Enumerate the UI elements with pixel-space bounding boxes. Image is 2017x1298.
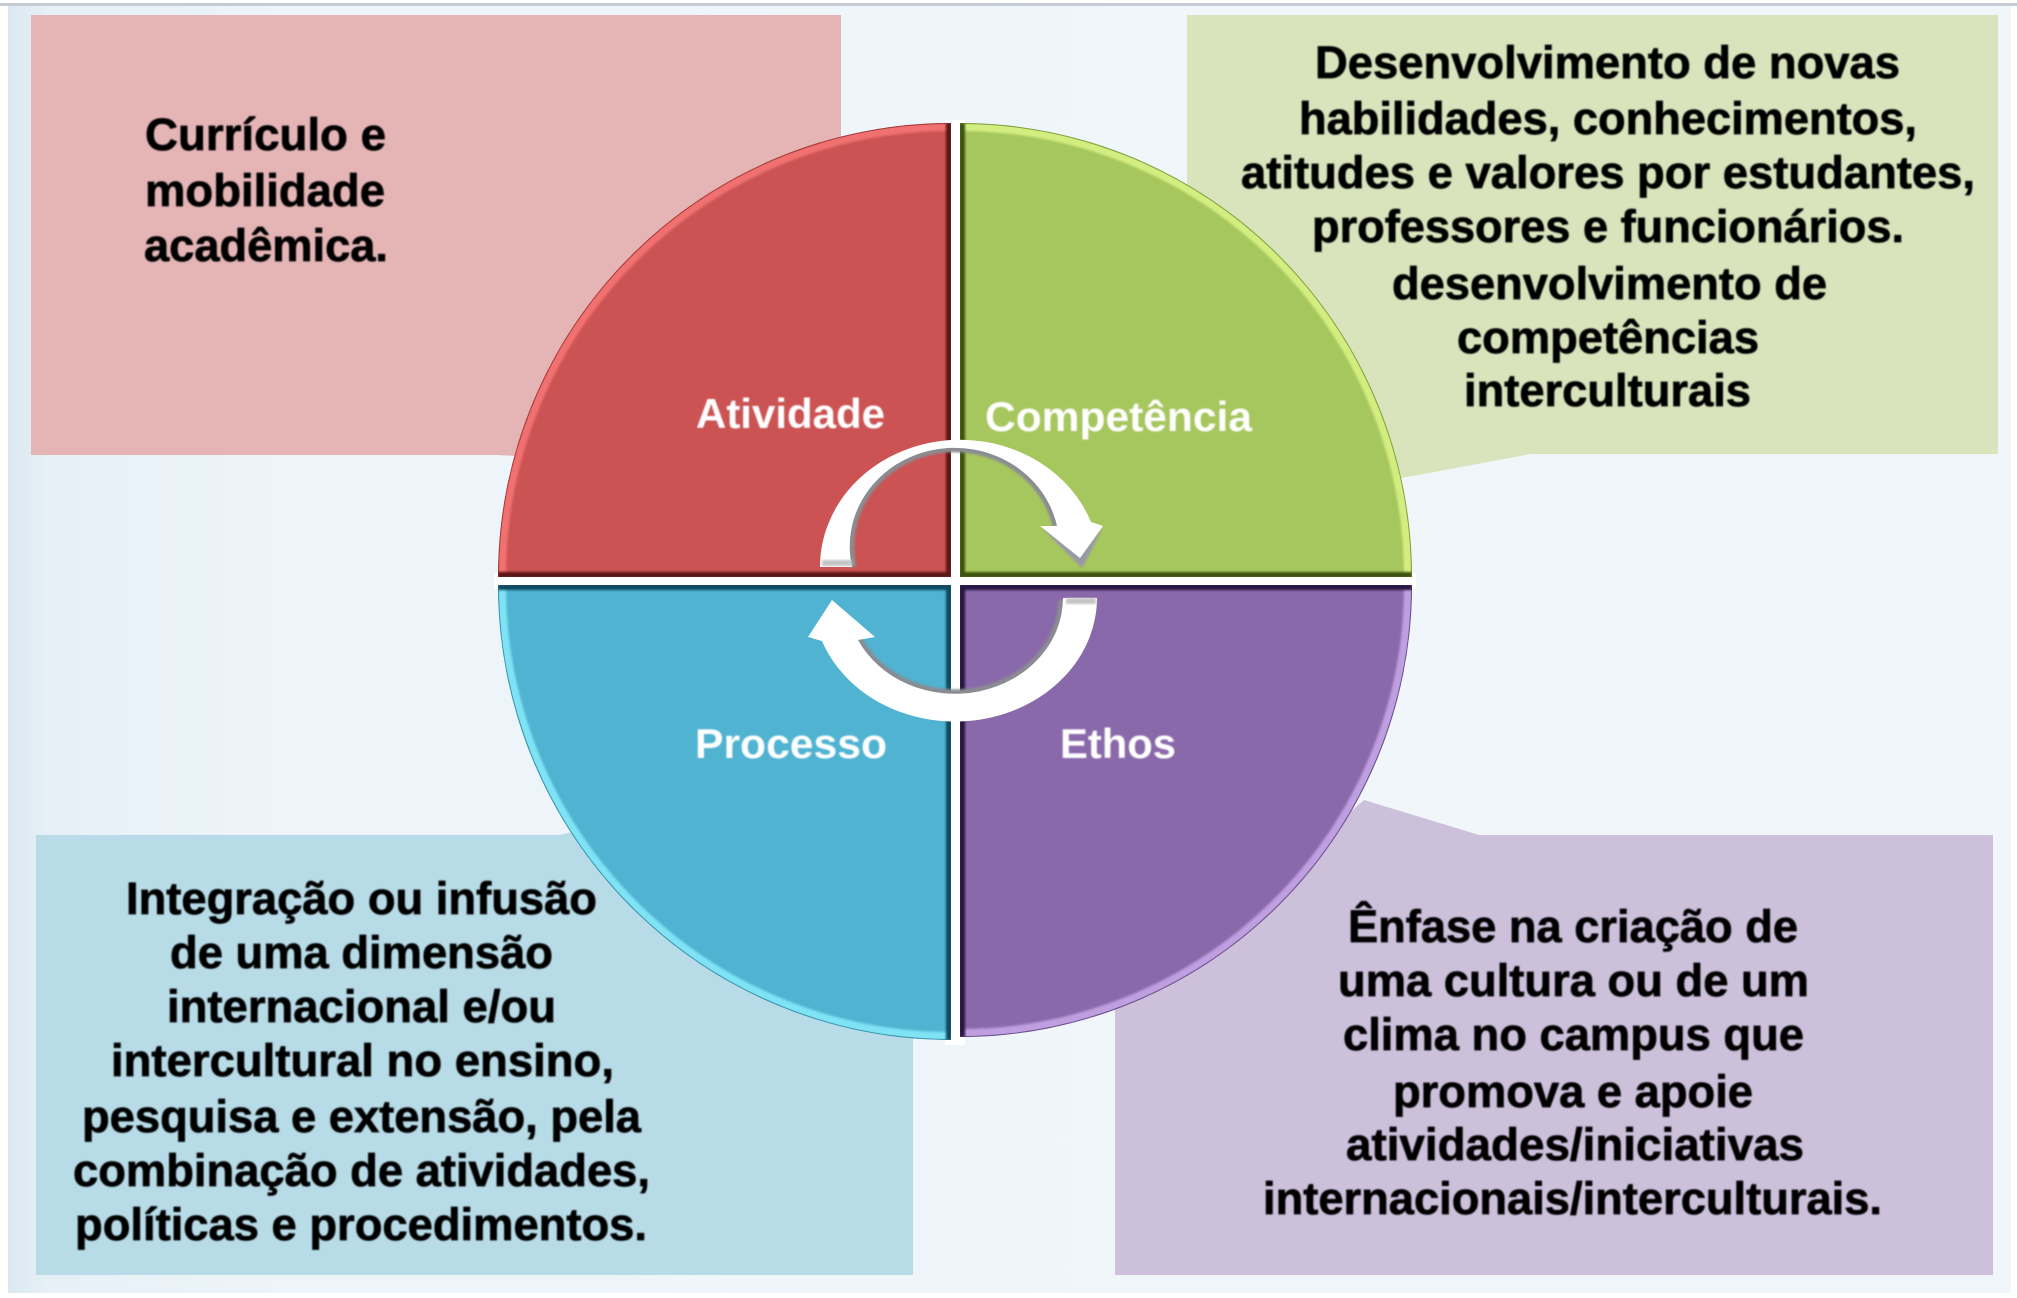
text: Ethos description: Ênfase na criação de bbox=[1348, 901, 1798, 952]
text: Ethos description bbox=[1263, 901, 1882, 1224]
text: Competência description: desenvolvimento de bbox=[1392, 258, 1827, 309]
quadrant: Competência bbox=[960, 123, 1412, 577]
text: Processo description: políticas e procedimentos. bbox=[75, 1199, 647, 1250]
circle diagram bbox=[494, 120, 1416, 1045]
text: Ethos description: internacionais/interculturais. bbox=[1263, 1173, 1882, 1224]
text: Competência description: interculturais bbox=[1464, 365, 1751, 416]
text: Competência description: Desenvolvimento de novas bbox=[1315, 37, 1900, 88]
label: Processo: Processo bbox=[695, 720, 887, 767]
quadrant: Processo bbox=[498, 585, 951, 1040]
text: Competência description: professores e funcionários. bbox=[1312, 201, 1904, 252]
text: Ethos description: promova e apoie bbox=[1393, 1066, 1753, 1117]
label: Atividade: Atividade bbox=[696, 390, 885, 437]
quadrant: Ethos bbox=[960, 585, 1412, 1037]
text: Ethos description: uma cultura ou de um bbox=[1338, 955, 1809, 1006]
text: Atividade description: Currículo e bbox=[145, 109, 386, 160]
text: Atividade description: mobilidade bbox=[145, 165, 385, 216]
arrow: bottom clockwise bbox=[808, 598, 1097, 722]
label: Competência: Competência bbox=[985, 393, 1253, 440]
text: Competência description bbox=[1241, 37, 1975, 416]
text: Atividade description bbox=[144, 109, 388, 271]
text: Competência description: competências bbox=[1457, 312, 1759, 363]
text: Competência description: atitudes e valores por estudantes, bbox=[1241, 147, 1975, 198]
text: Processo description: de uma dimensão bbox=[170, 927, 553, 978]
label: Ethos: Ethos bbox=[1060, 720, 1176, 767]
panel: Competência bbox=[1187, 15, 1998, 478]
panel: Processo bbox=[36, 825, 913, 1275]
text: Processo description: Integração ou infusão bbox=[126, 873, 597, 924]
text: Ethos description: clima no campus que bbox=[1343, 1009, 1804, 1060]
text: Processo description: internacional e/ou bbox=[167, 981, 556, 1032]
text: Processo description: combinação de atividades, bbox=[73, 1145, 650, 1196]
text: Processo description bbox=[73, 873, 650, 1250]
quadrant: Atividade bbox=[498, 123, 951, 577]
text: Competência description: habilidades, conhecimentos, bbox=[1299, 93, 1917, 144]
arrow: top clockwise bbox=[820, 440, 1103, 568]
text: Ethos description: atividades/iniciativas bbox=[1346, 1119, 1804, 1170]
panel: Ethos bbox=[1115, 800, 1993, 1275]
text: Processo description: pesquisa e extensão, pela bbox=[82, 1091, 642, 1142]
text: Atividade description: acadêmica. bbox=[144, 220, 388, 271]
panel: Atividade bbox=[31, 15, 841, 460]
text: Processo description: intercultural no ensino, bbox=[111, 1035, 614, 1086]
